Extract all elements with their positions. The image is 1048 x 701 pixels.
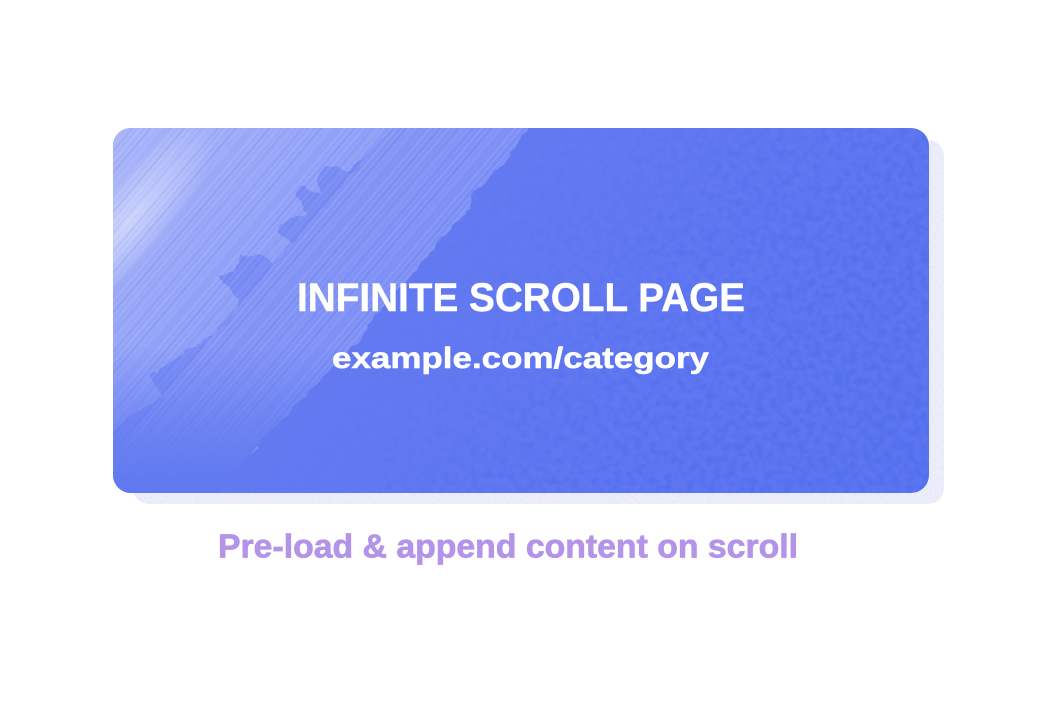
caption: Pre-load & append content on scroll: [218, 528, 798, 564]
mottled texture: [519, 128, 928, 492]
brush stroke: outer diagonal band: [100, 120, 533, 500]
subtitle url: example.com/category: [332, 342, 709, 375]
card shadow: [133, 140, 944, 504]
diagonal hatch lines: [113, 128, 528, 420]
highlight glow: [113, 138, 202, 283]
brush stroke: dark stain ridge: [150, 134, 388, 403]
bottom fade over band: [113, 362, 326, 493]
title: INFINITE SCROLL PAGE: [297, 276, 745, 320]
card base fill: [113, 128, 929, 493]
brush stroke: inner light band: [113, 128, 392, 398]
panel: infinite scroll page card: [100, 120, 929, 500]
